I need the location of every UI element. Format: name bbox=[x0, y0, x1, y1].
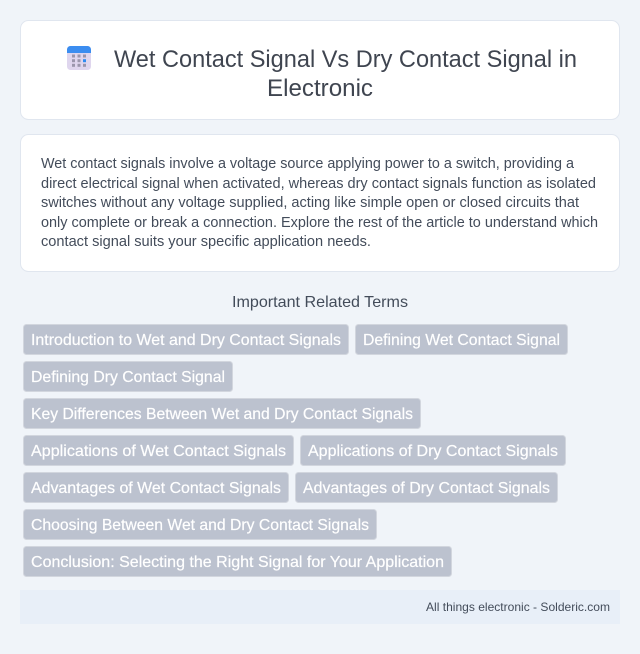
text block: description: contact signal suits your specific application needs. bbox=[41, 234, 371, 250]
tag bbox=[24, 324, 348, 354]
tag: Defining Dry Contact Signal bbox=[31, 369, 225, 386]
text block: description: direct electrical signal when activated, whereas dry contact signals function as isolated bbox=[41, 176, 596, 192]
tag: Defining Wet Contact Signal bbox=[363, 332, 560, 349]
tag bbox=[24, 398, 420, 428]
tag bbox=[296, 472, 558, 502]
tag bbox=[356, 324, 568, 354]
tag bbox=[300, 436, 566, 466]
footer bbox=[20, 590, 620, 624]
tag bbox=[24, 472, 288, 502]
tag bbox=[24, 436, 294, 466]
title bbox=[114, 46, 577, 102]
tag: Advantages of Dry Contact Signals bbox=[303, 480, 550, 497]
tag: Introduction to Wet and Dry Contact Signals bbox=[31, 332, 341, 349]
footer: All things electronic - Solderic.com bbox=[426, 600, 610, 614]
tag: Conclusion: Selecting the Right Signal for Your Application bbox=[31, 554, 444, 571]
tag: Advantages of Wet Contact Signals bbox=[31, 480, 281, 497]
tag bbox=[24, 362, 232, 392]
panel: title card bbox=[20, 20, 620, 120]
heading: related terms: Important Related Terms bbox=[232, 294, 408, 311]
text block: description: only complete or break a connection. Explore the rest of the article to understand which bbox=[41, 215, 598, 231]
text block: description: Wet contact signals involve a voltage source applying power to a switch, providing a bbox=[41, 156, 574, 172]
tag: Applications of Dry Contact Signals bbox=[308, 443, 558, 460]
tag bbox=[24, 546, 452, 576]
text block: description: switches without any voltage supplied, acting like simple open or closed circuits that bbox=[41, 195, 579, 211]
tag: Key Differences Between Wet and Dry Contact Signals bbox=[31, 406, 413, 423]
title: Electronic bbox=[267, 75, 373, 102]
panel: description bbox=[20, 134, 620, 272]
text block: description bbox=[41, 156, 598, 250]
tag list bbox=[24, 324, 568, 576]
icon: calendar bbox=[67, 46, 91, 70]
tag: Choosing Between Wet and Dry Contact Signals bbox=[31, 517, 369, 534]
title: Wet Contact Signal Vs Dry Contact Signal in bbox=[114, 46, 577, 73]
tag: Applications of Wet Contact Signals bbox=[31, 443, 286, 460]
tag bbox=[24, 510, 376, 540]
